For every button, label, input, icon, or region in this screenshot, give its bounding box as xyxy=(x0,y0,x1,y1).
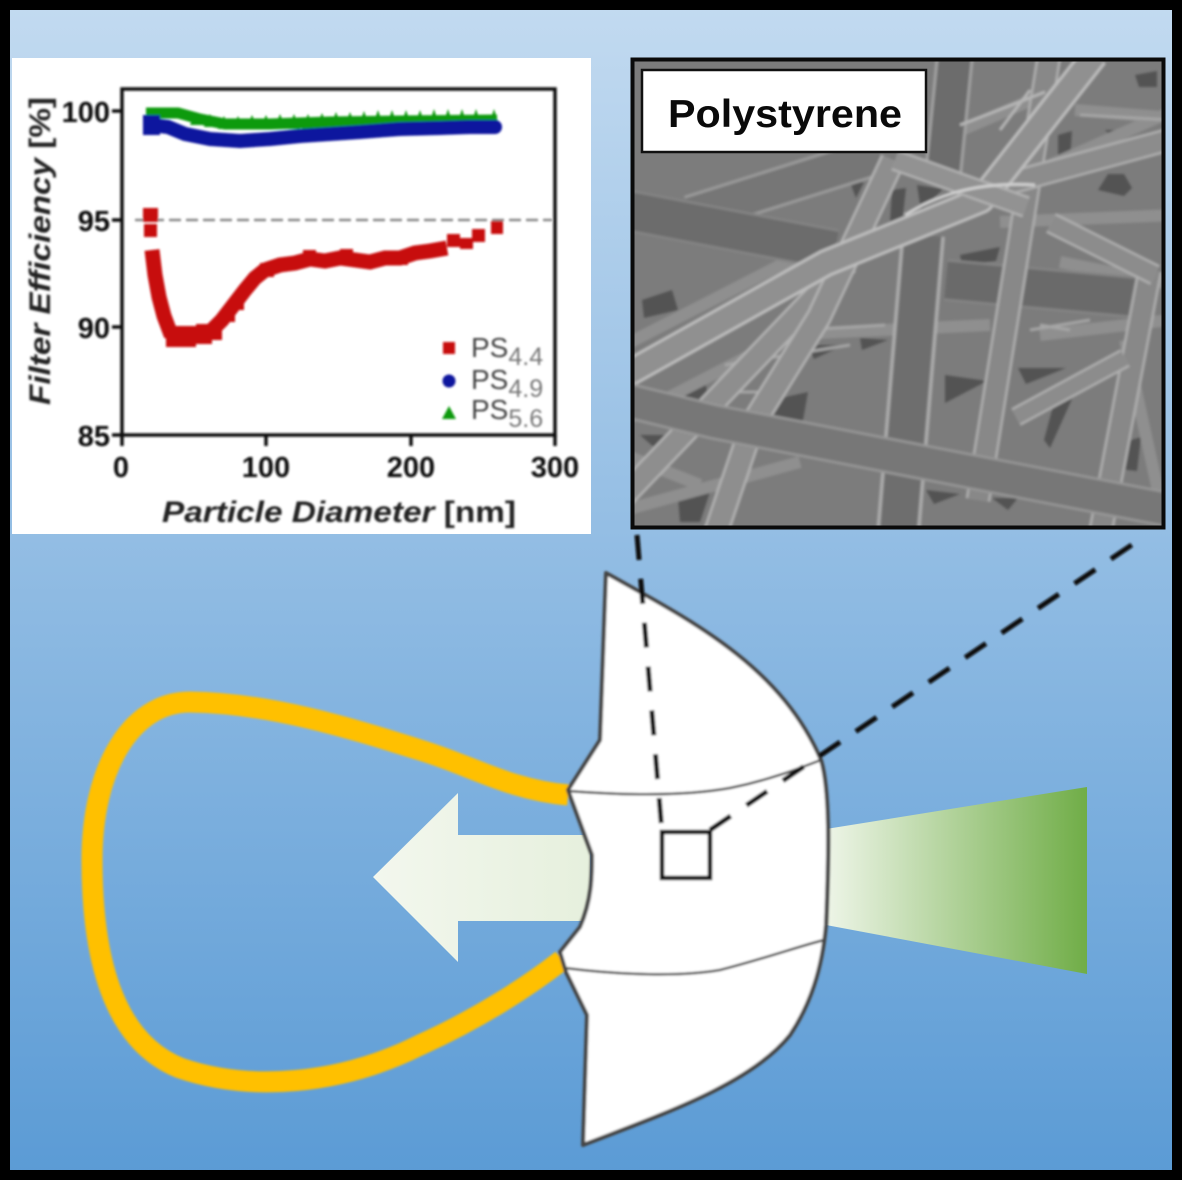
zoom dashed lines xyxy=(637,535,1145,832)
legend: 4.9 xyxy=(508,375,543,403)
diagonal fibres xyxy=(620,50,1175,535)
dark gaps xyxy=(640,71,1157,522)
panel: filter efficiency chart xyxy=(12,58,591,534)
series: PS 4.4 xyxy=(143,208,503,347)
series: PS 4.9 xyxy=(143,115,495,141)
vertical thick fibre xyxy=(898,55,955,535)
SEM panel border xyxy=(632,60,1164,528)
chart axes xyxy=(112,89,555,446)
x axis tick labels: 100 xyxy=(242,452,290,484)
y axis tick labels: 100 xyxy=(62,97,110,129)
y axis title: Filter Efficiency [%] xyxy=(24,97,57,405)
x axis title: Particle Diameter [nm] xyxy=(162,496,516,529)
label: Polystyrene xyxy=(642,70,926,152)
legend: 5.6 xyxy=(508,405,543,433)
mask body xyxy=(560,573,828,1145)
chart plot xyxy=(24,89,579,529)
legend xyxy=(442,332,543,433)
x axis tick labels: 200 xyxy=(387,452,435,484)
y axis tick labels: 95 xyxy=(78,206,110,238)
label: Polystyrene: Polystyrene xyxy=(668,93,902,136)
ear strap xyxy=(92,702,568,1082)
lower horizontal thick fibre xyxy=(625,400,1170,510)
legend: 4.4 xyxy=(508,343,543,371)
y axis tick labels: 85 xyxy=(78,421,110,453)
series: PS 5.6 xyxy=(146,109,500,129)
face mask illustration xyxy=(92,535,1145,1145)
horizontal thick fibres xyxy=(625,210,1142,298)
x axis tick labels: 0 xyxy=(113,452,129,484)
legend: PS xyxy=(471,394,508,425)
panel: polystyrene SEM micrograph xyxy=(620,50,1175,535)
background fibre mesh xyxy=(625,75,1175,510)
x axis tick labels: 300 xyxy=(531,452,579,484)
arrow: airflow through mask xyxy=(373,793,590,962)
mask seams xyxy=(565,760,824,974)
y axis tick labels xyxy=(62,97,110,453)
SEM fibres xyxy=(620,50,1175,535)
incoming air beam xyxy=(826,787,1087,974)
large fibre upper left xyxy=(690,155,880,215)
x axis tick labels xyxy=(113,452,579,484)
legend: PS xyxy=(471,332,508,363)
95 percent reference line xyxy=(135,219,552,221)
magnified area square xyxy=(662,832,710,878)
y axis tick labels: 90 xyxy=(78,313,110,345)
legend: PS xyxy=(471,364,508,395)
